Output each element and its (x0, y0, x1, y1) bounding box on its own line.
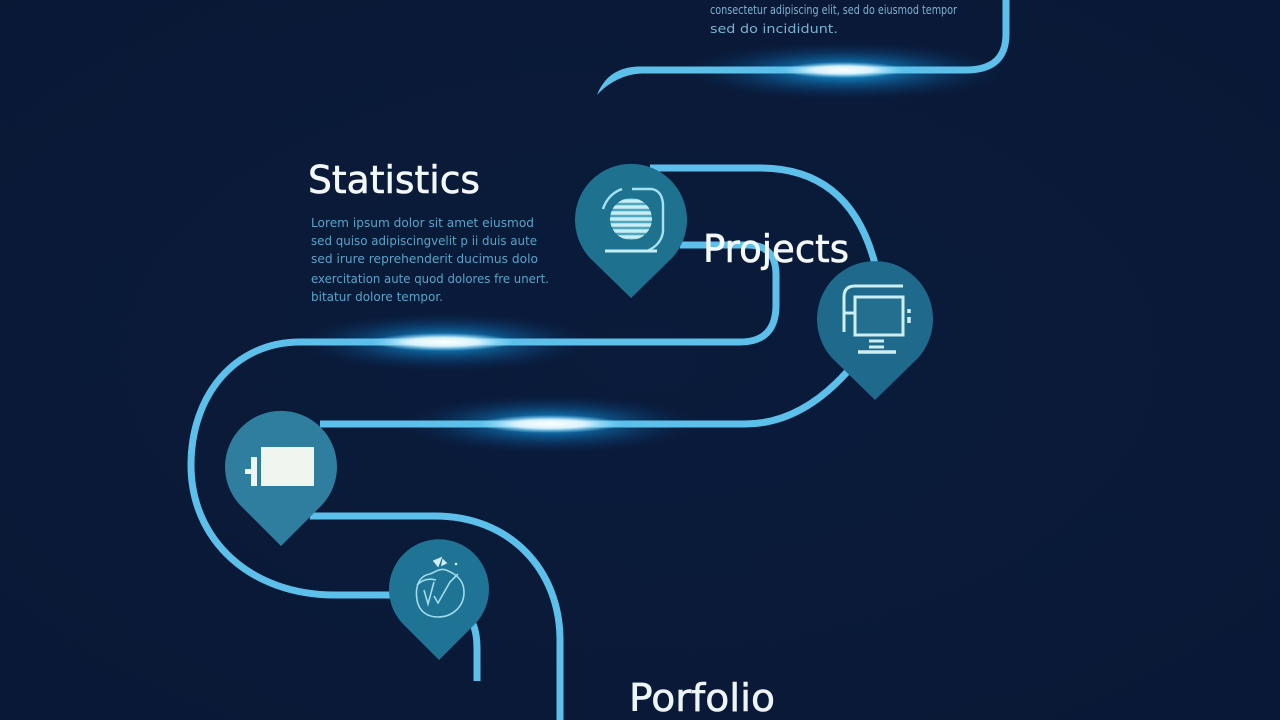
glow halos on middle paths (295, 312, 700, 454)
statistics description text: Lorem ipsum dolor sit amet eiusmod (311, 216, 534, 230)
main winding path (191, 168, 875, 720)
pin: statistics globe icon (575, 164, 687, 298)
statistics description text (311, 216, 549, 304)
heading: Statistics: Statistics (308, 158, 480, 202)
top path segment (597, 0, 1006, 95)
pin: portfolio sketch icon (389, 539, 489, 660)
statistics description text: bitatur dolore tempor. (311, 290, 443, 304)
top description text (710, 3, 957, 36)
statistics description text: sed irure reprehenderit ducimus dolo (311, 252, 538, 266)
statistics description text: sed quiso adipiscingvelit p ii duis aute (311, 234, 537, 248)
top description text: consectetur adipiscing elit, sed do eiusmod tempor (710, 3, 957, 17)
pin: projects monitor icon (817, 261, 933, 400)
heading: Portfolio: Porfolio (629, 676, 775, 720)
top glow behind path (680, 41, 1010, 101)
statistics description text: exercitation aute quod dolores fre unert. (311, 272, 549, 286)
top description text: sed do incididunt. (710, 22, 838, 36)
heading: Projects: Projects (703, 227, 849, 271)
glow highlights on middle paths (371, 333, 622, 433)
top glow highlight (781, 62, 905, 78)
pin: solid rectangle icon (225, 411, 337, 546)
